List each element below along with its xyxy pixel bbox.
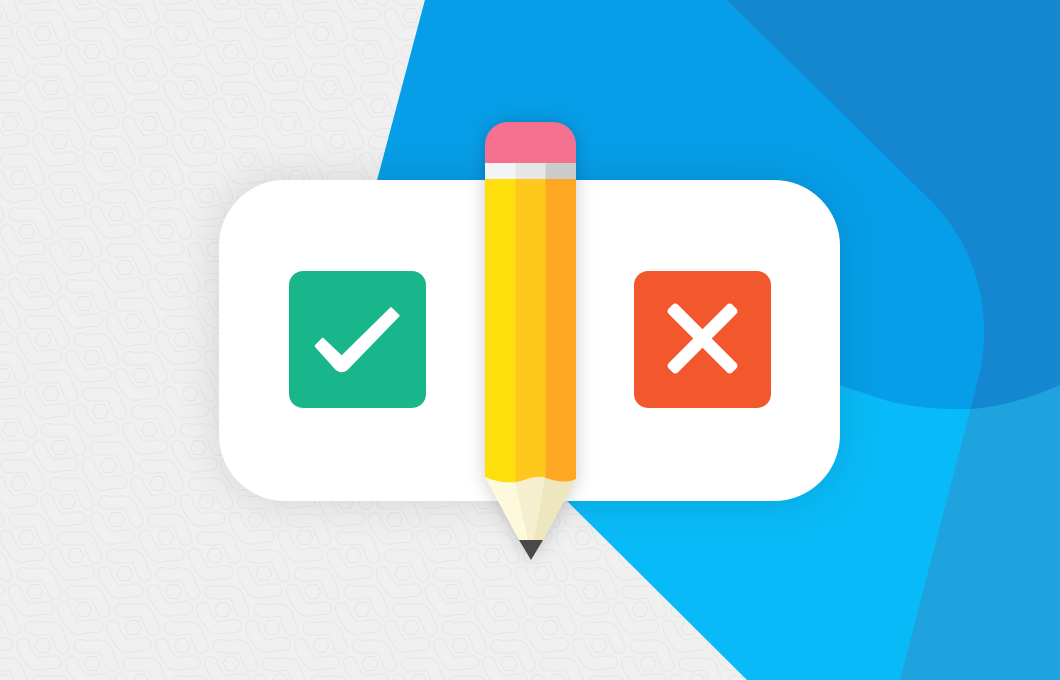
pencil eraser bbox=[485, 122, 576, 163]
icon: red cross button bbox=[634, 271, 771, 408]
icon: pencil bbox=[485, 122, 576, 560]
blue background shapes bbox=[340, 0, 1060, 680]
pencil graphite point bbox=[519, 540, 543, 560]
icon: green check button bbox=[289, 271, 426, 408]
pencil tip wood bbox=[485, 477, 576, 540]
pencil ferrule bbox=[485, 163, 576, 179]
pencil body bbox=[485, 179, 576, 482]
panel: white rounded card bbox=[219, 180, 840, 501]
